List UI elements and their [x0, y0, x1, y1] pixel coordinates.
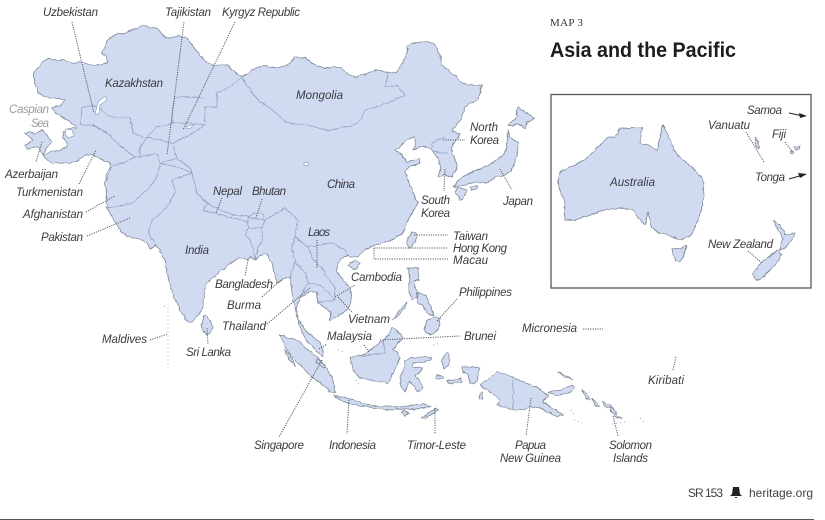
map: Papua New Guinea [480, 372, 563, 417]
label: Pakistan [41, 218, 130, 244]
label: Kyrgyz Republic: Kyrgyz Republic [222, 7, 300, 19]
map: Tasmania [672, 245, 687, 262]
label: Vanuatu: Vanuatu [708, 120, 751, 132]
label: Indonesia: Indonesia [329, 440, 376, 452]
label: Papua New Guinea [500, 398, 561, 465]
label: South Korea [421, 169, 450, 220]
label: Burma: Burma [227, 300, 261, 312]
label: Turkmenistan: Turkmenistan [16, 187, 83, 199]
label: Tonga with arrow: Tonga [755, 172, 785, 184]
label: Malaysia [319, 331, 372, 352]
label: Japan [500, 169, 533, 208]
label: Azerbaijan: Azerbaijan [4, 169, 58, 181]
label: Vietnam [338, 297, 390, 326]
label: Solomon Islands [609, 416, 652, 465]
label: Macau: Macau [453, 255, 489, 267]
label: Brunei [380, 331, 496, 343]
label: Thailand [222, 287, 311, 333]
label: Samoa with arrow [747, 105, 807, 118]
label: South Korea: Korea [421, 208, 450, 220]
label: South Korea: South [421, 195, 450, 207]
map: Maldives [164, 306, 168, 366]
label: India: India [185, 245, 209, 257]
label: Nepal: Nepal [213, 186, 242, 198]
map: Asia mainland [33, 25, 482, 357]
label: Bhutan: Bhutan [252, 186, 286, 198]
label: Solomon Islands: Islands [613, 453, 648, 465]
label: Laos [308, 227, 330, 268]
label: Singapore [254, 360, 322, 452]
label: Caspian Sea [9, 104, 49, 130]
label: Philippines: Philippines [459, 287, 512, 299]
label: Australia: Australia [609, 177, 655, 189]
map: Indonesia and Southeast Asian islands [280, 268, 645, 424]
label: Macau [374, 248, 489, 267]
label: Maldives: Maldives [102, 334, 147, 346]
China and Mongolia border [242, 73, 405, 131]
label: Bangladesh: Bangladesh [215, 279, 273, 291]
label: Japan: Japan [502, 196, 533, 208]
map: Azerbaijan [24, 130, 52, 155]
label: Cambodia: Cambodia [351, 272, 402, 284]
Aral Sea and Caspian details [95, 96, 107, 114]
label: Afghanistan: Afghanistan [22, 209, 83, 221]
label: Kyrgyz Republic [183, 7, 300, 130]
map: Sri Lanka [202, 315, 213, 334]
label: Sri Lanka [186, 328, 231, 359]
label: New Zealand [708, 239, 774, 263]
label: Solomon Islands: Solomon [609, 440, 652, 452]
label: Hong Kong: Hong Kong [453, 243, 508, 255]
label: Kiribati: Kiribati [648, 375, 684, 387]
map: Japan, Korea, Taiwan and Hainan islands [348, 107, 535, 270]
label: Papua New Guinea: New Guinea [500, 453, 561, 465]
label: Tajikistan: Tajikistan [165, 7, 211, 19]
Central Asia and South Asia borders [80, 107, 205, 157]
label: Nepal [213, 186, 242, 213]
label: Bangladesh [215, 260, 273, 291]
label: Sri Lanka: Sri Lanka [186, 347, 231, 359]
label: Cambodia [335, 272, 402, 297]
label: North Korea [443, 122, 499, 147]
label: North Korea: North [470, 122, 498, 134]
label: New Zealand: New Zealand [708, 239, 774, 251]
title: Asia and the Pacific [550, 39, 736, 62]
label: Pakistan: Pakistan [41, 232, 83, 244]
label: Philippines [437, 287, 512, 321]
label: Tajikistan [165, 7, 211, 155]
label: Timor-Leste [407, 408, 466, 452]
label: Burma [227, 280, 281, 312]
label: Micronesia: Micronesia [522, 323, 577, 335]
label: Kazakhstan: Kazakhstan [105, 78, 163, 90]
footer: report number and source [688, 486, 813, 500]
label: Indonesia [329, 400, 376, 452]
footer: report number and source: SR 153 [688, 486, 723, 500]
label: North Korea: Korea [470, 135, 499, 147]
footer: report number and source: heritage.org [749, 486, 813, 500]
label: Fiji [772, 129, 792, 151]
label: Samoa with arrow: Samoa [747, 105, 782, 117]
label: Micronesia [522, 323, 603, 335]
label: Maldives [102, 334, 168, 346]
label: Laos: Laos [308, 227, 330, 239]
label: Thailand: Thailand [222, 321, 267, 333]
label: Vietnam: Vietnam [348, 314, 390, 326]
label: Timor-Leste: Timor-Leste [407, 440, 466, 452]
label: Hong Kong [374, 243, 508, 255]
label: Bhutan [252, 186, 286, 218]
label: Afghanistan [22, 196, 115, 221]
label: Mongolia: Mongolia [296, 90, 343, 102]
label: Caspian Sea: Sea [31, 118, 49, 130]
label: Tonga with arrow [755, 172, 807, 184]
label: Caspian Sea: Caspian [9, 104, 49, 116]
label: Taiwan [414, 231, 488, 243]
label: Kiribati [648, 357, 684, 387]
label: Azerbaijan [4, 142, 58, 181]
label: Taiwan: Taiwan [453, 231, 488, 243]
map: Vanuatu and Fiji islands [755, 137, 759, 148]
label: Papua New Guinea: Papua [515, 440, 546, 452]
map: Australia [558, 125, 704, 240]
icon: liberty bell [730, 487, 742, 498]
map: New Zealand [773, 220, 795, 250]
label: Turkmenistan [16, 150, 96, 199]
label: Uzbekistan: Uzbekistan [43, 7, 98, 19]
label: Fiji: Fiji [772, 129, 786, 141]
label: Singapore: Singapore [254, 440, 304, 452]
label: Malaysia: Malaysia [327, 331, 372, 343]
map number: MAP 3 [550, 17, 583, 29]
label: Brunei: Brunei [464, 331, 496, 343]
label: China: China [327, 179, 355, 191]
label: Uzbekistan [43, 7, 98, 113]
inset panel: Australia and Pacific islands [551, 94, 811, 288]
label: Vanuatu [708, 120, 764, 162]
